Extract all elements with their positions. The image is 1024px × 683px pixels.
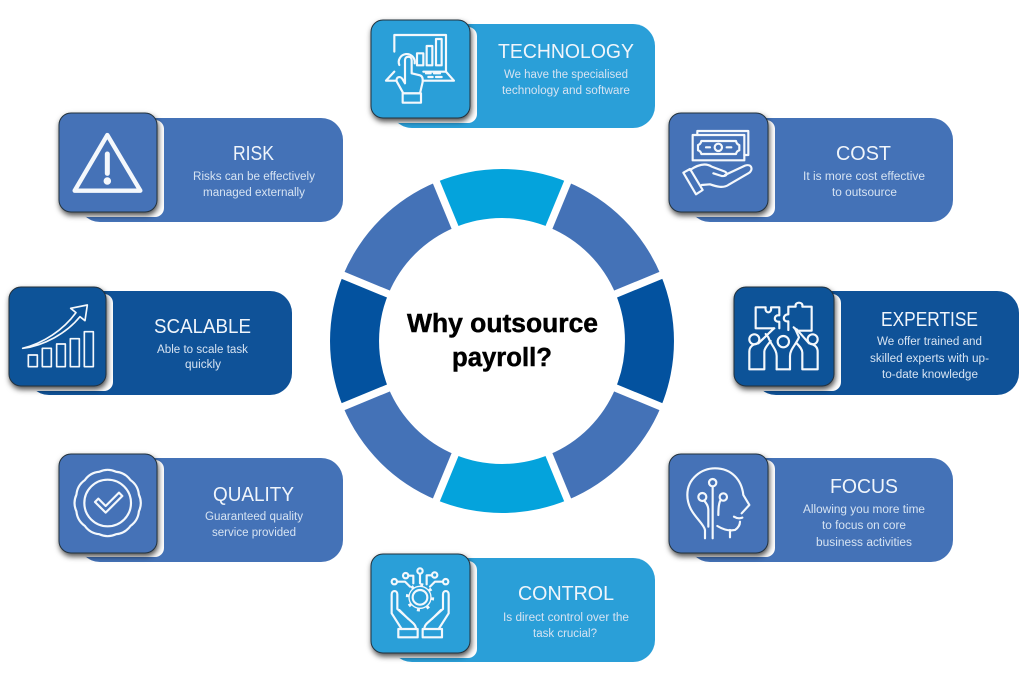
text: COST bbox=[836, 142, 891, 165]
card: expertise: to-date knowledge bbox=[882, 369, 978, 381]
card: control: Is direct control over the bbox=[503, 612, 629, 624]
icon: warning triangle bbox=[75, 135, 140, 191]
text: SCALABLE bbox=[154, 315, 251, 338]
card: technology: technology and software bbox=[502, 85, 630, 97]
icon tile bbox=[734, 287, 834, 386]
icon tile bbox=[59, 454, 157, 553]
card: quality: Guaranteed quality bbox=[205, 511, 303, 523]
icon: people holding puzzle pieces bbox=[749, 303, 818, 369]
card: scalable bbox=[9, 287, 292, 395]
icon tile bbox=[59, 113, 157, 212]
panel background bbox=[390, 558, 655, 662]
panel background bbox=[27, 291, 292, 395]
text: RISK bbox=[233, 142, 274, 165]
text: FOCUS bbox=[830, 475, 898, 498]
title bbox=[407, 310, 598, 372]
text: CONTROL bbox=[518, 582, 614, 605]
card: cost: to outsource bbox=[832, 187, 897, 199]
panel background bbox=[688, 458, 953, 562]
card: focus: Allowing you more time bbox=[803, 504, 925, 516]
card: control bbox=[371, 554, 655, 662]
card: focus bbox=[669, 454, 953, 562]
card: expertise bbox=[734, 287, 1019, 395]
icon: hands holding gear bbox=[392, 568, 449, 637]
card: cost: It is more cost effective bbox=[803, 171, 925, 183]
central ring bbox=[330, 169, 674, 513]
text: EXPERTISE bbox=[881, 308, 978, 331]
card: quality: service provided bbox=[212, 527, 296, 539]
card: risk bbox=[59, 113, 343, 222]
text: TECHNOLOGY bbox=[498, 40, 634, 63]
icon tile bbox=[9, 287, 106, 386]
icon: hand touching laptop chart bbox=[386, 35, 454, 103]
icon: growth bars and arrow bbox=[23, 305, 93, 367]
panel background bbox=[754, 291, 1019, 395]
card: focus: to focus on core bbox=[822, 520, 906, 532]
card: technology: We have the specialised bbox=[504, 69, 628, 81]
panel background bbox=[390, 24, 655, 128]
card: expertise: We offer trained and bbox=[877, 336, 982, 348]
icon tile bbox=[669, 454, 768, 553]
card: quality bbox=[59, 454, 343, 562]
title: payroll? bbox=[452, 344, 552, 372]
card: scalable: quickly bbox=[185, 359, 221, 371]
card: technology bbox=[371, 20, 655, 128]
card: control: task crucial? bbox=[533, 628, 597, 640]
icon tile bbox=[371, 554, 470, 653]
card: scalable: Able to scale task bbox=[157, 344, 248, 356]
icon: hand holding money bbox=[683, 131, 752, 194]
card: cost bbox=[669, 113, 953, 222]
title: Why outsource bbox=[407, 310, 598, 338]
panel background bbox=[688, 118, 953, 222]
card: risk: managed externally bbox=[203, 187, 305, 199]
icon: quality badge with check bbox=[75, 470, 141, 536]
card: expertise: skilled experts with up- bbox=[870, 353, 989, 365]
card: risk: Risks can be effectively bbox=[193, 171, 315, 183]
icon: head with circuits bbox=[687, 468, 749, 538]
icon tile bbox=[669, 113, 768, 212]
panel background bbox=[78, 118, 343, 222]
icon tile bbox=[371, 20, 470, 118]
text: QUALITY bbox=[213, 483, 294, 506]
panel background bbox=[78, 458, 343, 562]
card: focus: business activities bbox=[816, 537, 912, 549]
